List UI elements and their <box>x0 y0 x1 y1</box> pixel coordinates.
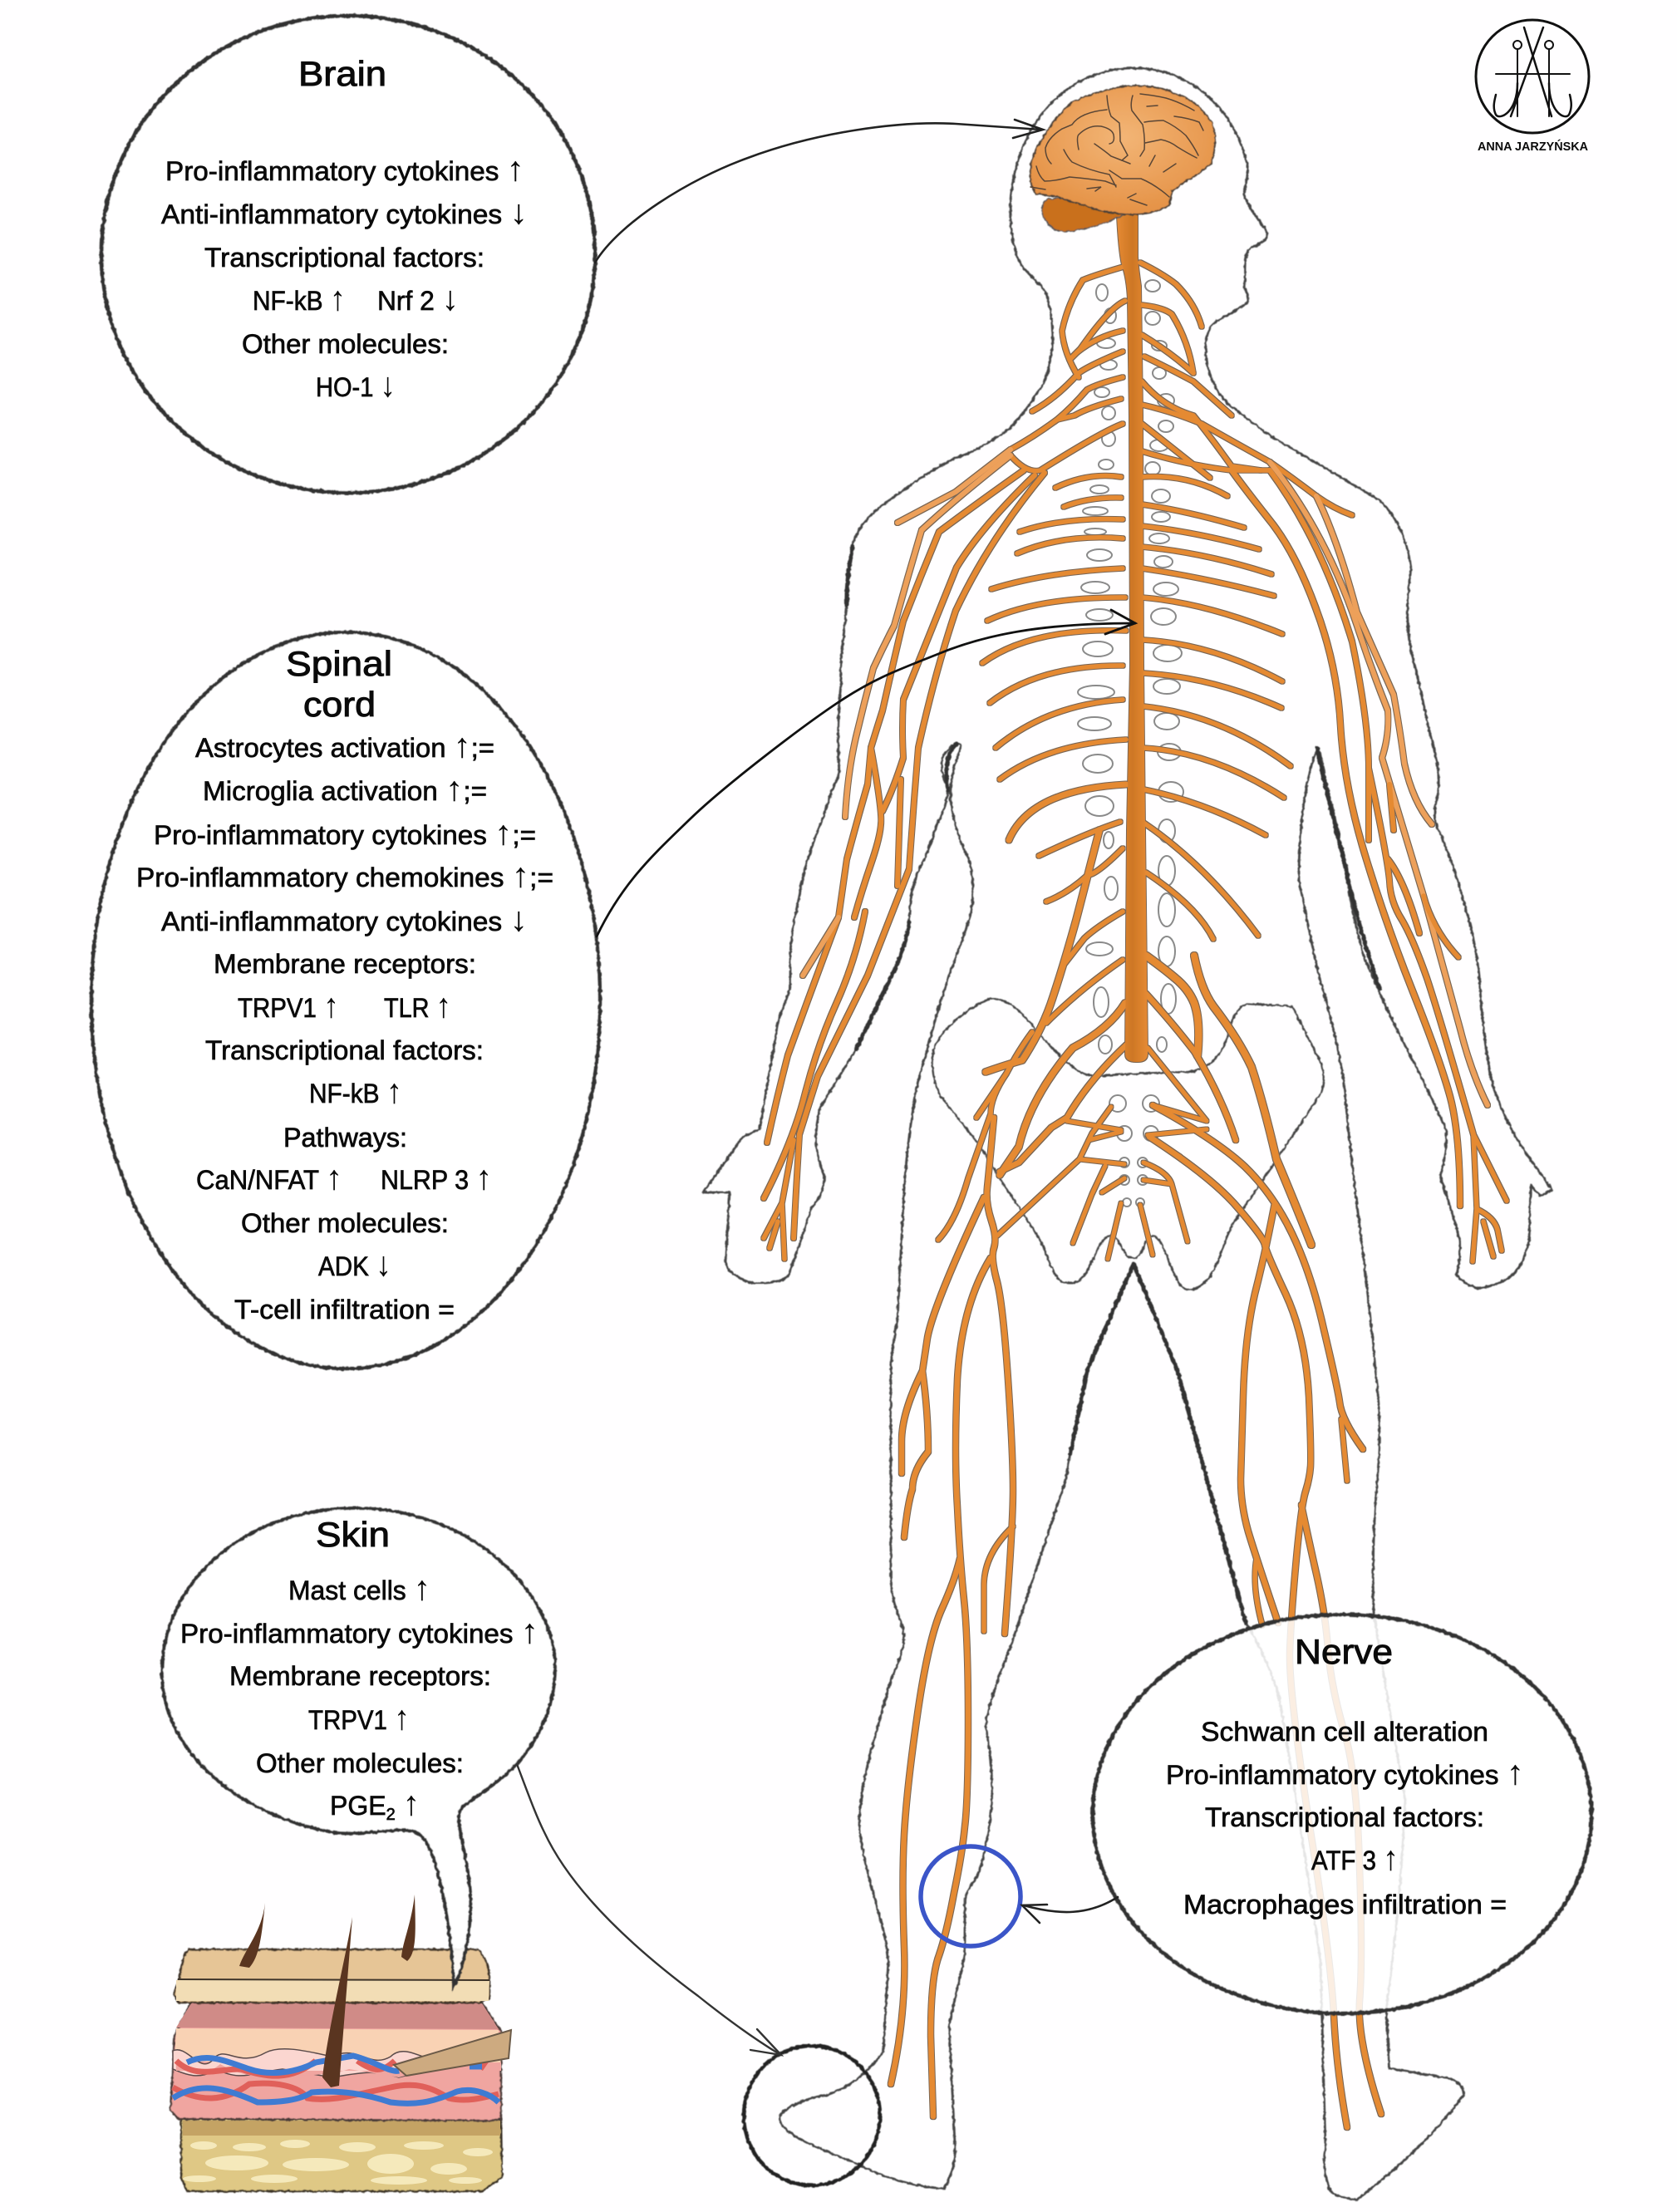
skin list: Pro-inflammatory cytokines ↑ <box>180 1612 539 1650</box>
nervous system <box>764 214 1507 2127</box>
spinal cord list: CaN/NFAT ↑ <box>196 1158 342 1197</box>
heading: spinal cord: Spinal <box>286 644 392 683</box>
brain list: Transcriptional factors: <box>204 243 484 273</box>
heading: nerve: Nerve <box>1295 1632 1393 1671</box>
callout: brain <box>101 16 595 493</box>
heading: spinal cord: cord <box>303 685 376 724</box>
skin layers illustration <box>170 1895 511 2191</box>
spinal nerves left <box>938 265 1129 1259</box>
spinal cord list: Membrane receptors: <box>214 949 476 979</box>
spinal cord list: TRPV1 ↑ <box>238 986 339 1025</box>
icon: cerebellum <box>1042 198 1124 231</box>
skin list: Membrane receptors: <box>229 1661 491 1691</box>
heading: spinal cord <box>286 644 392 724</box>
skin list: Mast cells ↑ <box>288 1569 430 1607</box>
spinal cord list: Microglia activation ↑;= <box>203 769 487 808</box>
skin list: 2 <box>386 1806 396 1824</box>
left arm nerves <box>764 450 1045 1259</box>
heading: brain: Brain <box>298 54 386 93</box>
spinal cord list: Other molecules: <box>241 1208 449 1238</box>
body outline <box>703 68 1552 2200</box>
spinal cord list: NF-kB ↑ <box>309 1072 402 1110</box>
dermis layer <box>170 2003 501 2121</box>
spinal nerves right <box>1140 263 1352 1255</box>
spinal cord list: ADK ↓ <box>318 1245 391 1283</box>
icon: foot highlight circle <box>744 2046 880 2185</box>
spinal cord list: Anti-inflammatory cytokines ↓ <box>161 900 528 938</box>
brain list: HO-1 ↓ <box>316 366 396 404</box>
pelvis outline <box>932 999 1324 1290</box>
heading: skin: Skin <box>316 1515 390 1554</box>
spinal cord list: T-cell infiltration = <box>234 1295 455 1325</box>
nerve list: ATF 3 ↑ <box>1311 1839 1399 1877</box>
brain list: Other molecules: <box>242 329 449 359</box>
callout: spinal cord <box>91 632 600 1369</box>
arrow: nerve callout to blue circle <box>1022 1897 1118 1923</box>
brain list: Pro-inflammatory cytokines ↑ <box>165 150 524 188</box>
skin list: Other molecules: <box>256 1748 464 1778</box>
sacral right <box>1140 1048 1207 1255</box>
arrow: spinal cord callout to spinal cord <box>597 610 1135 936</box>
spinal cord <box>1117 214 1148 1062</box>
spinal cord list: Astrocytes activation ↑;= <box>195 726 494 764</box>
sacral left <box>997 1107 1124 1259</box>
right arm nerves <box>1232 462 1507 1261</box>
spinal cord list <box>136 726 553 1325</box>
nerve list: Pro-inflammatory cytokines ↑ <box>1166 1753 1524 1792</box>
leg nerves <box>891 1105 1381 2127</box>
icon: blue nerve highlight circle <box>921 1846 1020 1946</box>
spinal cord list: Transcriptional factors: <box>205 1035 484 1065</box>
nerve list: Macrophages infiltration = <box>1183 1890 1507 1920</box>
nerve list: Schwann cell alteration <box>1201 1717 1488 1747</box>
logo: author monogram <box>1476 20 1589 133</box>
arrow: brain callout to brain <box>595 120 1043 263</box>
skin list <box>180 1569 539 1824</box>
brain list: NF-kB ↑ <box>253 279 346 317</box>
spinal cord list: Pathways: <box>283 1123 407 1153</box>
icon: brain <box>1030 86 1215 214</box>
arrow: skin callout to foot <box>517 1764 781 2055</box>
callout: nerve <box>1093 1615 1591 2013</box>
author credit: ANNA JARZYŃSKA <box>1478 140 1589 154</box>
vertebrae and foramina <box>1078 280 1183 1207</box>
spinal cord list: TLR ↑ <box>384 986 451 1025</box>
skin list: TRPV1 ↑ <box>308 1698 410 1737</box>
brain list <box>161 150 528 404</box>
callout: skin <box>162 1508 555 1986</box>
skin list: PGE <box>330 1791 386 1821</box>
nerve fibre in skin <box>394 2030 511 2076</box>
epidermis layer <box>174 1949 489 2003</box>
brain list: Nrf 2 ↓ <box>377 279 459 317</box>
spinal cord list: Pro-inflammatory chemokines ↑;= <box>136 856 553 894</box>
spinal cord list: Pro-inflammatory cytokines ↑;= <box>154 814 536 852</box>
hair follicles <box>239 1895 416 2087</box>
nerve list: Transcriptional factors: <box>1205 1802 1484 1832</box>
nerve list <box>1166 1717 1524 1920</box>
brain list: Anti-inflammatory cytokines ↓ <box>161 193 528 231</box>
spinal cord list: NLRP 3 ↑ <box>381 1158 492 1197</box>
fat layer <box>181 2119 502 2191</box>
skin list: ↑ <box>403 1784 420 1822</box>
